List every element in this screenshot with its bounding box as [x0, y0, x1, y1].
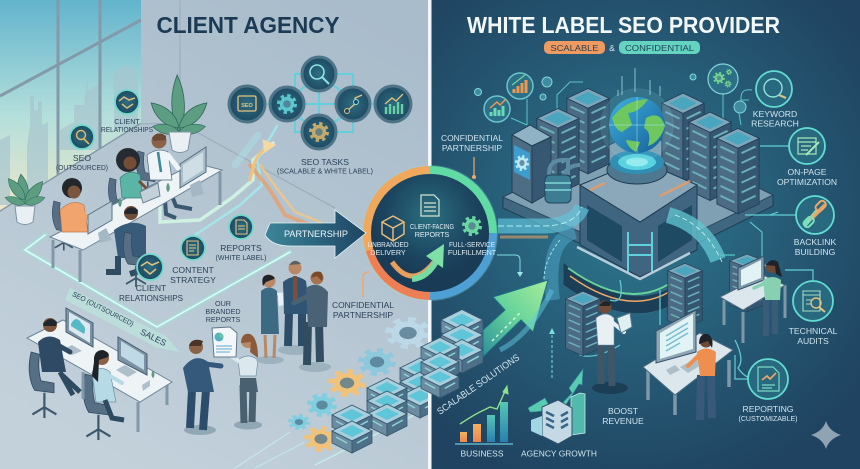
ribbon arrow: seo outsourced and sales: SALES: [139, 327, 168, 348]
coolant tank and pipes: [545, 160, 580, 203]
partnership arrow: [265, 210, 366, 258]
label: agency growth: AGENCY GROWTH: [521, 448, 597, 458]
label: reporting customizable: (CUSTOMIZABLE): [738, 414, 798, 423]
task: seo page icon: SEO: [241, 103, 254, 109]
platform base: [503, 130, 773, 262]
person: seated man: [38, 318, 70, 372]
label: boost revenue: BOOST: [608, 406, 639, 416]
label: left confidential partnership: CONFIDENTIAL: [332, 300, 394, 310]
person: man seen from behind: [106, 206, 146, 274]
scaling light lines: [235, 408, 428, 468]
person: man from behind: [294, 272, 328, 365]
plant: left pot: [4, 174, 46, 224]
label: keyword research: KEYWORD: [753, 109, 797, 119]
label: our branded reports: BRANDED: [205, 307, 241, 316]
label: reports white label: [216, 243, 266, 262]
partnership arrow: PARTNERSHIP: [284, 228, 348, 239]
task: path nodes: [336, 87, 370, 121]
connector: left confidential partnership: [363, 272, 369, 297]
label: seo tasks: SEO TASKS: [301, 157, 349, 167]
sparkle watermark: [811, 421, 841, 449]
service: technical audits icon: [793, 281, 833, 321]
person: woman in orange top: [60, 178, 92, 232]
label: backlink building: BUILDING: [795, 247, 836, 257]
icon: report document: [421, 195, 439, 216]
swirl arrow inside hub: [392, 244, 444, 279]
person: seated woman: [92, 350, 124, 420]
label: technical audits: [789, 326, 838, 346]
connector: right confidential partnership: [472, 157, 476, 179]
rack: lower left server: [566, 291, 600, 356]
task: seo page icon: [229, 86, 265, 122]
person: man with glasses: [283, 261, 310, 346]
label: content strategy: CONTENT: [172, 265, 215, 275]
label: seo tasks: (SCALABLE & WHITE LABEL): [277, 166, 373, 176]
growth arrow: scalable solutions: [483, 280, 552, 357]
server stacks: right side: [421, 310, 483, 398]
service: reporting icon: [748, 359, 788, 399]
gears and server stacks: [290, 319, 440, 453]
label: content strategy: STRATEGY: [170, 275, 216, 285]
globe: [601, 89, 673, 161]
ampersand: &: [609, 43, 615, 53]
task: growth chart: [375, 86, 411, 122]
label: left confidential partnership: [332, 300, 394, 320]
floating data bubbles: [474, 64, 752, 125]
light beams above globe: [618, 68, 660, 96]
label: content strategy: [170, 265, 216, 285]
label: technical audits: TECHNICAL: [789, 326, 838, 336]
group: standing man and woman with report: [183, 327, 262, 435]
person: woman in blue suit: [261, 274, 288, 358]
connector: fulfillment arrow: [497, 255, 523, 277]
label: on-page optimization: [777, 167, 837, 187]
rack: right server: [730, 254, 764, 312]
seo tasks network: [229, 57, 411, 149]
label: on-page optimization: ON-PAGE: [788, 167, 827, 177]
label: client relationships upper: [101, 117, 153, 134]
label: left confidential partnership: PARTNERSHIP: [333, 310, 393, 320]
service: keyword research icon: [756, 71, 792, 107]
panel: white label provider background: [431, 0, 860, 469]
label: our branded reports: REPORTS: [206, 315, 241, 324]
document: our branded reports: [212, 327, 237, 357]
person: man in white shirt: [147, 133, 178, 180]
label: client relationships lower: CLIENT: [136, 283, 167, 293]
label: keyword research: [751, 109, 799, 128]
label: client-facing reports: REPORTS: [415, 230, 450, 239]
label: client relationships lower: RELATIONSHIPS: [119, 293, 183, 303]
rack: center server: [668, 263, 702, 328]
label: seo outsourced upper: [56, 153, 108, 172]
person: analyst in orange: [688, 334, 716, 420]
icon: fulfillment gear: [464, 218, 480, 234]
label: right confidential partnership: [441, 133, 503, 153]
chart: business growth bars: [455, 386, 513, 444]
label: unbranded delivery: UNBRANDED: [368, 240, 408, 249]
label: boost revenue: REVENUE: [602, 416, 644, 426]
workstation: lower office desk: [27, 308, 172, 440]
panel: client agency background: [0, 0, 429, 469]
service: on-page optimization icon: [789, 128, 825, 164]
label: backlink building: BACKLINK: [794, 237, 837, 247]
label: reports white label: REPORTS: [220, 243, 262, 253]
icon: delivery box: [382, 216, 404, 241]
title: Client Agency: CLIENT AGENCY: [156, 12, 340, 38]
person: woman with long hair: [228, 334, 258, 423]
rack: screen unit: [512, 125, 551, 203]
label: our branded reports: OUR: [215, 299, 231, 308]
label: right confidential partnership: PARTNERSHIP: [442, 143, 502, 153]
label: backlink building: [794, 237, 837, 257]
workstation: rear desk with analyst: [720, 256, 785, 343]
label: seo outsourced upper: SEO: [73, 153, 91, 163]
office window with skyline: [0, 0, 141, 212]
label: reporting customizable: REPORTING: [743, 404, 794, 414]
task: gold gear: [302, 115, 336, 149]
person: man in navy suit: [183, 340, 221, 430]
label: right confidential partnership: CONFIDENTIAL: [441, 133, 503, 143]
icon: client relationships handshake lower: [137, 254, 163, 280]
icon: building with growth arrow: [528, 369, 585, 444]
floor and wall corner: [141, 0, 335, 208]
task: magnifier: [302, 57, 336, 91]
label: reports white label: (WHITE LABEL): [216, 253, 266, 262]
connector lines to service icons: [735, 146, 813, 379]
flow: glowing partnership ribbons: [25, 126, 320, 327]
workstation: front desk with analyst: [643, 310, 733, 420]
data ribbons: [498, 207, 772, 300]
label: unbranded delivery: [368, 240, 408, 257]
service: backlink building icon: [796, 196, 834, 234]
ribbon arrow: seo outsourced and sales: SEO (OUTSOURCED): [71, 289, 135, 328]
dashed arrow: upward: [549, 328, 555, 378]
label: reporting customizable: [738, 404, 798, 423]
icon: content strategy: [181, 236, 205, 260]
person: woman in teal top: [116, 148, 148, 198]
icon: seo outsourced magnifier: [70, 125, 94, 149]
workstation: upper office desk with team: [50, 133, 222, 287]
label: seo tasks: [277, 157, 373, 176]
title: White Label SEO Provider: WHITE LABEL SEO PROVIDER: [467, 12, 780, 38]
label: seo outsourced upper: (OUTSOURCED): [56, 163, 108, 172]
hub: central partnership circle: [362, 165, 498, 301]
center divider: [428, 0, 432, 469]
ribbon arrow: seo outsourced and sales: [65, 288, 180, 352]
badge: scalable: [544, 41, 605, 54]
label: client relationships upper: CLIENT: [114, 117, 140, 126]
server platform with racks and globe: [503, 68, 773, 279]
label: client-facing reports: [410, 222, 454, 239]
badge: scalable: SCALABLE: [550, 43, 599, 53]
label: our branded reports: [205, 299, 241, 324]
central pedestal: [577, 150, 697, 279]
label: scalable solutions: SCALABLE SOLUTIONS: [435, 352, 522, 418]
person: man with tablet: [592, 300, 632, 394]
label: client relationships upper: RELATIONSHIPS: [101, 125, 153, 134]
group: three business people: [256, 261, 331, 372]
label: client relationships lower: [119, 283, 183, 303]
label: on-page optimization: OPTIMIZATION: [777, 177, 837, 187]
icon: client relationships handshake: [115, 90, 139, 114]
label: business: BUSINESS: [460, 448, 504, 458]
badge: confidential: [619, 41, 700, 54]
label: keyword research: RESEARCH: [751, 118, 799, 128]
lower base bowl: [563, 262, 752, 378]
label: technical audits: AUDITS: [797, 336, 829, 346]
badge: confidential: CONFIDENTIAL: [625, 43, 694, 53]
task: settings gear: [270, 87, 304, 121]
label: full-service fulfillment: [448, 240, 497, 257]
plant: center pot: [147, 75, 211, 152]
label: full-service fulfillment: FULL-SERVICE: [449, 240, 495, 249]
label: full-service fulfillment: FULFILLMENT: [448, 248, 497, 257]
label: client-facing reports: CLIENT-FACING: [410, 222, 454, 231]
label: unbranded delivery: DELIVERY: [370, 248, 406, 257]
person: analyst in green: [754, 260, 782, 336]
label: boost revenue: [602, 406, 644, 426]
icon: reports document: [229, 215, 253, 239]
